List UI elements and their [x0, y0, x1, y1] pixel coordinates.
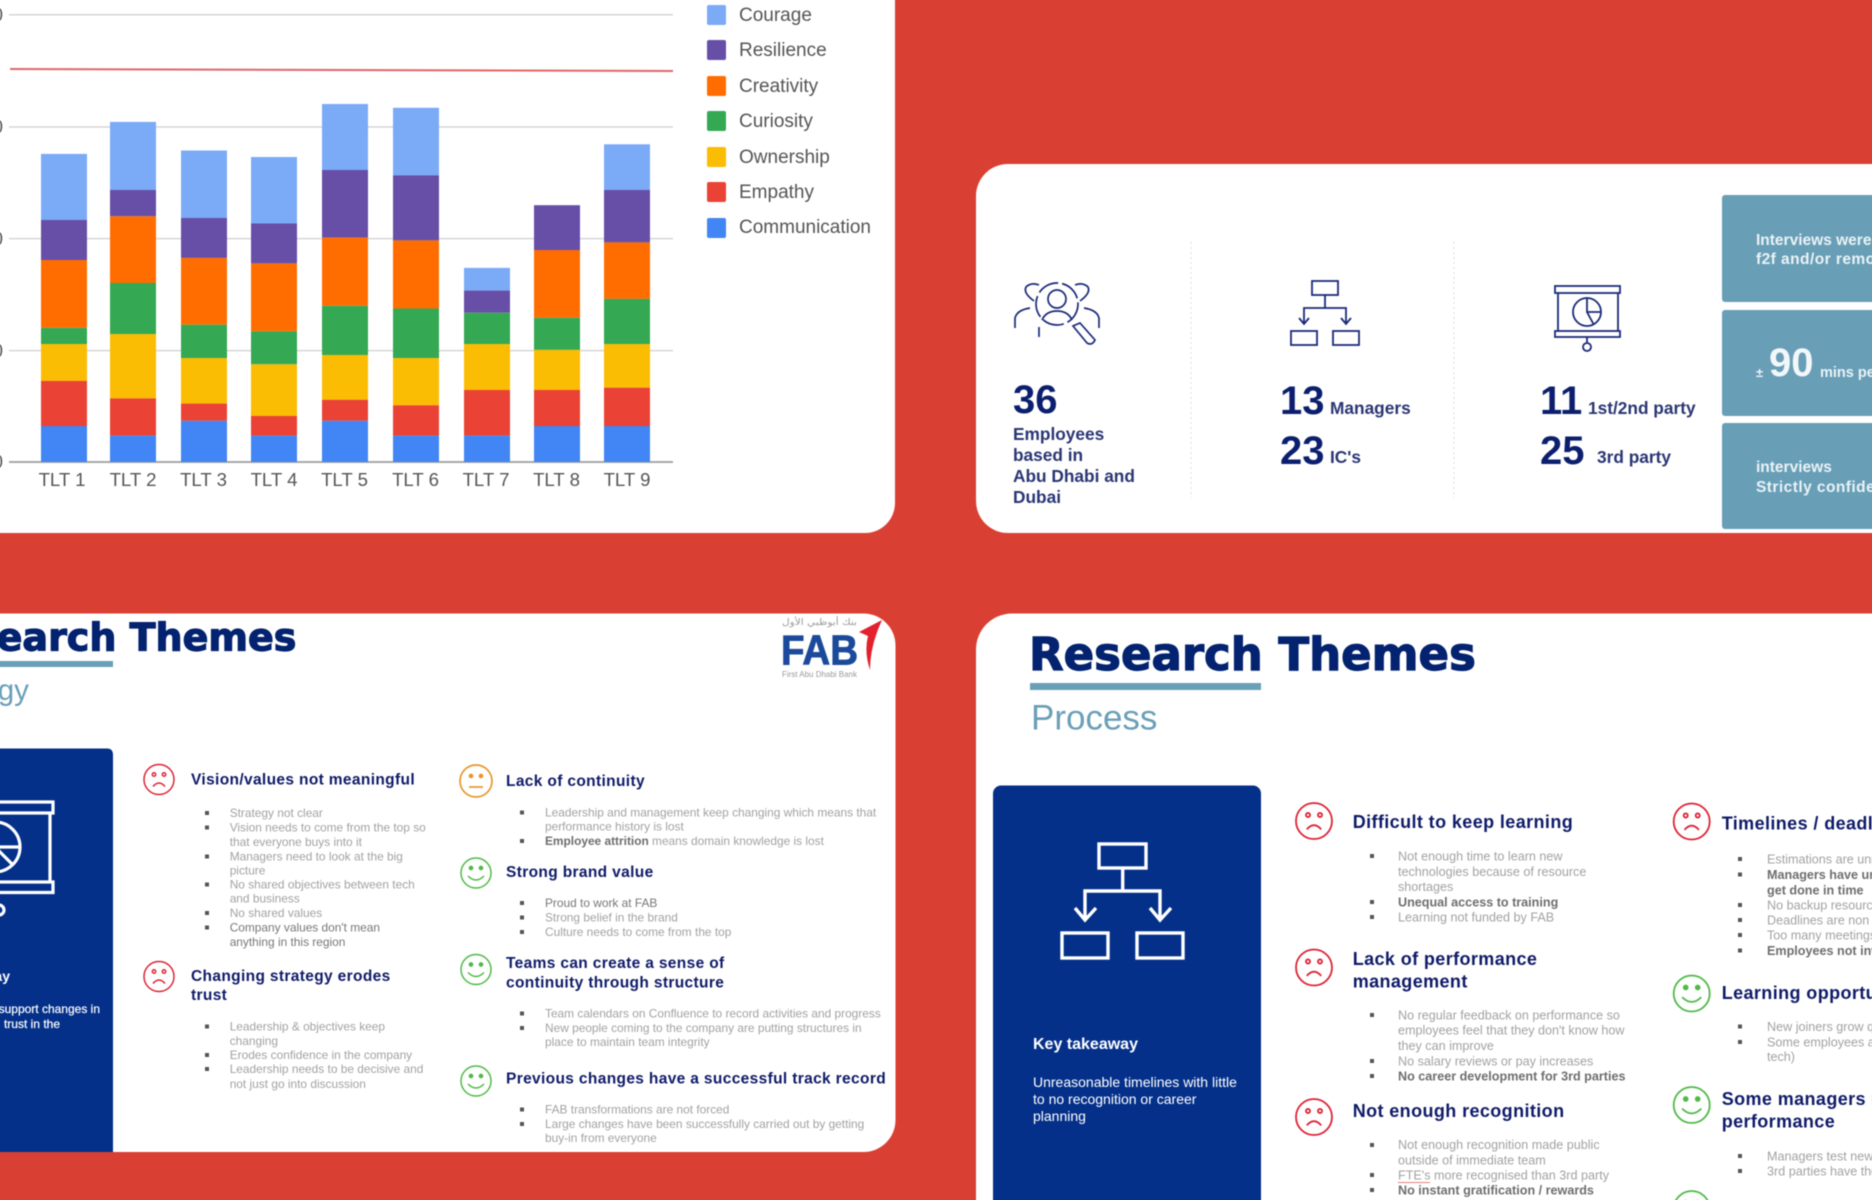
stat: party split: 25 [1540, 429, 1584, 473]
theme: not enough recognition: outside of immediate team [1398, 1154, 1546, 1168]
x axis labels: TLT 9 [604, 469, 650, 490]
theme: difficult to keep learning: Difficult to keep learning [1353, 812, 1573, 832]
x axis labels: TLT 5 [321, 469, 368, 490]
divider [1453, 242, 1455, 498]
theme: difficult to keep learning: Learning not funded by FAB [1398, 910, 1554, 924]
theme: previous changes: FAB transformations are not forced [545, 1102, 729, 1116]
theme: strong brand value [461, 858, 732, 939]
theme: teams create continuity: Teams can create a sense of [506, 955, 725, 972]
theme: strong brand value: Culture needs to come from the top [545, 925, 732, 939]
stat: party split [1540, 379, 1696, 473]
theme: vision and values: Managers need to look at the big [230, 850, 403, 864]
theme: changing strategy: Leadership & objectives keep [230, 1020, 385, 1034]
theme: vision and values: anything in this region [230, 935, 345, 949]
bar: TLT 7 [464, 268, 510, 462]
theme: lack of performance management: No career development for 3rd parties [1398, 1070, 1625, 1084]
callout: interview duration: ± [1756, 365, 1763, 380]
x axis labels: TLT 8 [533, 469, 580, 490]
stat: managers and ICs: Managers [1330, 398, 1411, 418]
icon: presentation board [0, 802, 53, 915]
bar: TLT 4 [251, 157, 297, 462]
stat: party split: 3rd party [1597, 447, 1671, 467]
subtitle: Process [1031, 698, 1157, 738]
theme: timelines and deadlines: get done in time [1767, 884, 1864, 898]
stat: 36 employees: Abu Dhabi and [1013, 466, 1135, 486]
logo: FAB [781, 616, 882, 679]
stat: party split: 1st/2nd party [1588, 398, 1696, 418]
stat: managers and ICs: 13 [1280, 379, 1324, 423]
theme: teams create continuity: place to maintain team integrity [545, 1035, 710, 1049]
chart gridlines and axis labels [0, 4, 673, 472]
theme: lack of continuity: Employee attrition means domain knowledge is lost [545, 834, 825, 848]
theme: vision and values: Vision needs to come from the top so [230, 820, 426, 834]
theme: lack of performance management [1296, 949, 1625, 1084]
callout: interview format [1722, 195, 1872, 302]
callout: interview format: Interviews were [1756, 232, 1872, 249]
theme: strong brand value: Proud to work at FAB [545, 896, 657, 910]
theme: difficult to keep learning [1296, 803, 1586, 924]
bar: TLT 3 [181, 150, 227, 462]
theme: strong brand value: Strong belief in the brand [545, 910, 678, 924]
theme: not enough recognition: Not enough recognition made public [1398, 1138, 1600, 1152]
theme: not enough recognition [1296, 1099, 1610, 1198]
icon: smile cut off at the bottom edge [1674, 1191, 1710, 1200]
title underline [0, 661, 113, 667]
callout: confidentiality: interviews [1756, 459, 1832, 476]
icon: org chart [1062, 844, 1183, 958]
bar: TLT 1 [41, 154, 87, 462]
theme: changing strategy [144, 962, 423, 1091]
stat: 36 employees: 36 [1013, 378, 1058, 422]
bar: TLT 8 [534, 205, 580, 462]
theme: teams create continuity: New people coming to the company are putting structures in [545, 1021, 862, 1035]
bar: TLT 6 [393, 108, 439, 462]
logo: FAB: بنك أبوظبي الأول [782, 616, 857, 628]
theme: difficult to keep learning: technologies because of resource [1398, 865, 1586, 879]
callout: interview duration: 90 [1769, 341, 1814, 385]
logo: FAB: FAB [781, 626, 858, 674]
theme: lack of performance management: they can improve [1398, 1039, 1494, 1053]
callout: interview duration [1722, 310, 1872, 416]
theme: lack of performance management: No regular feedback on performance so [1398, 1008, 1620, 1022]
theme: not enough recognition: FTE's more recognised than 3rd party [1398, 1168, 1610, 1182]
chart legend: Creativity [739, 76, 819, 97]
theme: some managers recognise performance [1674, 1087, 1872, 1178]
theme: vision and values: No shared values [230, 906, 322, 920]
theme: some managers recognise performance: performance [1722, 1112, 1835, 1132]
theme: lack of continuity: Lack of continuity [506, 773, 645, 790]
theme: difficult to keep learning: Not enough time to learn new [1398, 850, 1563, 864]
stat: managers and ICs: 23 [1280, 429, 1324, 473]
theme: timelines and deadlines [1674, 804, 1872, 958]
chart legend: Resilience [739, 40, 827, 61]
theme: lack of continuity: performance history is lost [545, 820, 684, 834]
theme: changing strategy: trust [191, 987, 227, 1004]
x axis labels: TLT 7 [463, 469, 509, 490]
stat: managers and ICs: IC's [1330, 447, 1361, 467]
theme: vision and values: Vision/values not meaningful [191, 772, 415, 788]
theme: not enough recognition: Not enough recognition [1353, 1101, 1564, 1121]
key takeaway panel: process [993, 786, 1261, 1200]
theme: teams create continuity: Team calendars on Confluence to record activities and progress [545, 1006, 881, 1020]
x axis labels: TLT 2 [110, 469, 156, 490]
chart legend: Courage [739, 5, 812, 26]
key takeaway panel: strategy: support changes in [0, 1002, 100, 1016]
chart legend: Ownership [739, 147, 830, 168]
icon: presentation board [1555, 286, 1620, 351]
theme: learning opportunities: tech) [1767, 1050, 1795, 1064]
theme: previous changes: Large changes have been successfully carried out by getting [545, 1117, 864, 1131]
theme: difficult to keep learning: Unequal access to training [1398, 896, 1558, 910]
x axis labels: TLT 1 [39, 469, 85, 490]
theme: vision and values: and business [230, 892, 300, 906]
x axis labels: TLT 4 [251, 469, 297, 490]
key takeaway panel: strategy [0, 748, 113, 1152]
theme: learning opportunities [1674, 976, 1872, 1064]
theme: teams create continuity: continuity through structure [506, 974, 724, 992]
panel: research themes strategy slide [0, 614, 896, 1152]
theme: not enough recognition: No instant gratification / rewards [1398, 1184, 1594, 1198]
theme: changing strategy: Changing strategy erodes [191, 968, 391, 985]
theme: changing strategy: not just go into discussion [230, 1077, 366, 1091]
stat: 36 employees: Dubai [1013, 487, 1061, 507]
key takeaway panel: strategy: trust in the [4, 1017, 60, 1031]
theme: changing strategy: changing [230, 1034, 278, 1048]
theme: strong brand value: Strong brand value [506, 864, 654, 881]
key takeaway panel: process: Key takeaway [1033, 1036, 1138, 1053]
theme: lack of performance management: employees feel that they don't know how [1398, 1024, 1625, 1038]
logo: FAB: First Abu Dhabi Bank [782, 669, 858, 679]
callout: confidentiality [1722, 423, 1872, 529]
theme: difficult to keep learning: shortages [1398, 880, 1453, 894]
panel: research themes process slide [976, 614, 1872, 1200]
theme: previous changes [461, 1066, 886, 1145]
chart legend: Curiosity [739, 111, 813, 132]
stat: 36 employees [1013, 378, 1135, 507]
theme: vision and values: picture [230, 864, 266, 878]
title: Research Themes [1029, 628, 1476, 681]
panel: interview statistics slide [976, 164, 1872, 533]
theme: vision and values [144, 764, 426, 949]
panel: stacked bar chart slide [0, 0, 895, 533]
stat: 36 employees: based in [1013, 445, 1083, 465]
x axis labels [39, 469, 650, 490]
divider [1190, 242, 1192, 498]
key takeaway panel: process: planning [1033, 1108, 1086, 1124]
x axis labels: TLT 6 [392, 469, 439, 490]
theme: previous changes: buy-in from everyone [545, 1131, 657, 1145]
bar: TLT 9 [604, 144, 650, 462]
theme: previous changes: Previous changes have a successful track record [506, 1070, 886, 1088]
title underline [1030, 683, 1261, 690]
theme: vision and values: Strategy not clear [230, 806, 323, 820]
theme: changing strategy: Erodes confidence in the company [230, 1048, 412, 1062]
red target line [10, 69, 673, 71]
theme: vision and values: Company values don't mean [230, 920, 380, 934]
key takeaway panel: process: to no recognition or career [1033, 1091, 1197, 1107]
icon: person with magnifier [1015, 283, 1099, 344]
bar: TLT 5 [322, 104, 368, 462]
chart legend: Empathy [739, 182, 814, 203]
theme: vision and values: that everyone buys into it [230, 835, 363, 849]
stat: managers and ICs [1280, 379, 1411, 473]
stat: party split: 11 [1540, 379, 1582, 423]
chart legend [707, 5, 871, 238]
theme: changing strategy: Leadership needs to be decisive and [230, 1062, 423, 1076]
chart legend: Communication [739, 217, 871, 238]
theme: lack of performance management: management [1353, 972, 1468, 992]
theme: lack of performance management: No salary reviews or pay increases [1398, 1054, 1593, 1068]
theme: lack of continuity: Leadership and management keep changing which means that [545, 806, 877, 820]
key takeaway panel: process: Unreasonable timelines with little [1033, 1074, 1237, 1090]
theme: lack of continuity [460, 765, 877, 848]
stat: 36 employees: Employees [1013, 424, 1104, 444]
icon: org chart [1291, 281, 1359, 345]
theme: vision and values: No shared objectives between tech [230, 878, 415, 892]
theme: teams create continuity [461, 954, 881, 1049]
theme: lack of performance management: Lack of performance [1353, 949, 1537, 969]
x axis labels: TLT 3 [180, 469, 227, 490]
bar: TLT 2 [110, 122, 156, 462]
